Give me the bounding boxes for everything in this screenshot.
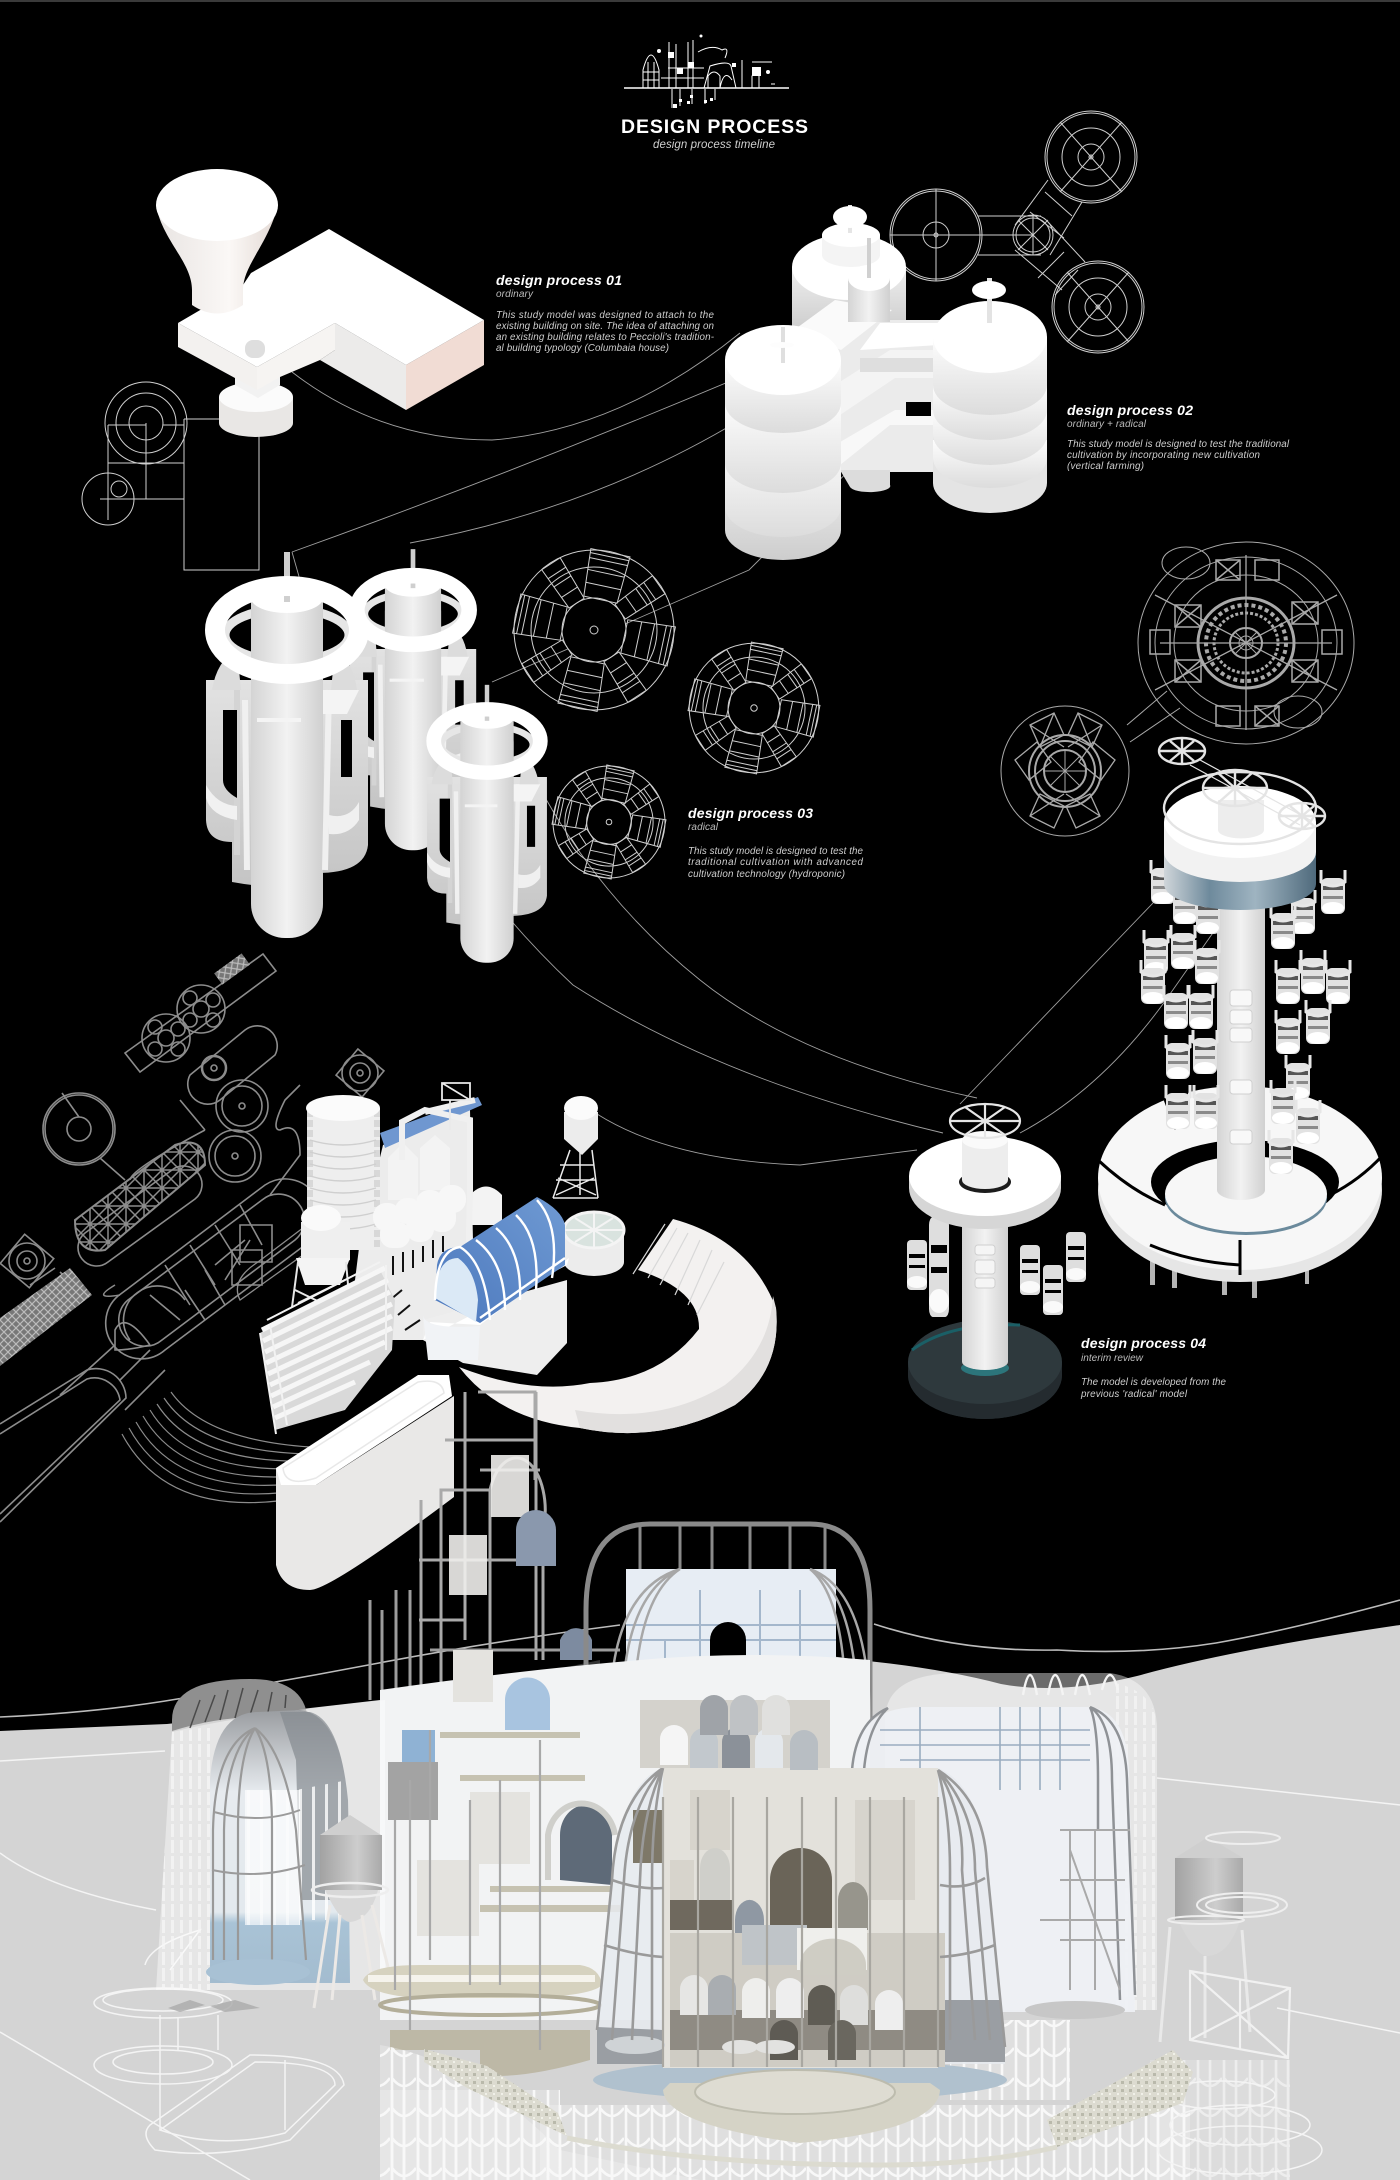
dark base disc — [908, 1331, 1062, 1419]
left top disc — [725, 325, 841, 395]
L-shaped block — [178, 323, 257, 390]
panel: final model upper section — [260, 1083, 777, 1590]
back cage arcs — [610, 1569, 870, 1720]
white platform background — [380, 1655, 870, 2020]
facade bars — [663, 1797, 938, 2067]
center pillar — [848, 278, 890, 322]
base block — [423, 1280, 567, 1375]
text: design process 02 — [1067, 402, 1290, 472]
text: design process 01 — [496, 272, 715, 354]
text: design process 02: design process 02 — [1067, 402, 1193, 418]
text: design process 02: (vertical farming) — [1067, 461, 1144, 472]
column windows — [1230, 990, 1252, 1144]
stage — [663, 2083, 940, 2143]
blue beams — [380, 1097, 482, 1148]
left water tank — [312, 1815, 394, 2008]
hanging pods left — [1141, 860, 1220, 1129]
top disc — [1164, 822, 1316, 882]
connector curves — [292, 333, 1250, 1165]
central facade — [663, 1768, 938, 2068]
plan drawing 02 — [890, 111, 1144, 353]
back stack — [792, 267, 906, 330]
text: design process 01: ordinary — [496, 289, 534, 300]
stone crescents — [424, 2049, 567, 2136]
right top knob — [987, 278, 992, 323]
icon: design process skyline logo — [624, 34, 789, 108]
bridges between stacks — [835, 320, 940, 472]
text: design process 04: design process 04 — [1081, 1335, 1206, 1351]
outer base rings — [1098, 1098, 1382, 1282]
left cage — [210, 1710, 350, 1983]
hanging pods right — [1269, 870, 1350, 1174]
text: design process 03: design process 03 — [688, 805, 813, 821]
wire substructure — [380, 2045, 700, 2180]
crescent amphitheatre — [459, 1219, 777, 1433]
plan room lines — [124, 1225, 272, 1340]
text: design process 01: design process 01 — [496, 272, 622, 288]
right stack — [933, 337, 1047, 513]
text: design process 04: interim review — [1081, 1353, 1144, 1364]
top wheel — [950, 1104, 1020, 1138]
front floor — [593, 2059, 1007, 2101]
truss capsule — [75, 1142, 205, 1251]
text: design process 01: al building typology (Columbaia house) — [496, 343, 669, 354]
small stud — [245, 340, 265, 358]
site plan drawing — [0, 953, 384, 1522]
back concrete arches — [640, 1695, 830, 1770]
medium tower — [350, 549, 476, 850]
upper bridge — [794, 300, 892, 350]
disc — [909, 1176, 1061, 1229]
right cage — [852, 1673, 1157, 2019]
text: design process 04: The model is developed from the — [1081, 1377, 1227, 1388]
lower cylinder — [219, 397, 293, 437]
top wire ring and wheels — [1159, 738, 1325, 844]
text: design process 02: ordinary + radical — [1067, 419, 1147, 430]
pods — [907, 1217, 1086, 1317]
panels and platforms — [363, 1650, 620, 2076]
front cage glass — [597, 1768, 1005, 2064]
back panel — [626, 1569, 836, 1699]
left silo — [301, 1222, 350, 1268]
panel: final model — [0, 1392, 1400, 2180]
text: design process 04: previous 'radical' model — [1080, 1389, 1188, 1400]
glazed band — [1164, 850, 1316, 910]
ground plane — [0, 1625, 1400, 2180]
lower arches — [605, 1925, 945, 2067]
base legs — [1150, 1255, 1309, 1298]
large tower — [206, 552, 368, 938]
panel: design process 03 model — [206, 549, 547, 963]
ground wireframe — [0, 1751, 1400, 2180]
column — [962, 1200, 1008, 1370]
outer white left dome — [172, 1679, 308, 1731]
funnel — [156, 205, 278, 314]
core — [962, 1140, 1008, 1189]
column — [1217, 900, 1265, 1200]
text: design process 03 — [688, 805, 864, 880]
tall scaffold — [370, 1392, 620, 1730]
plan drawings 03 — [513, 549, 820, 879]
plan drawings 04 — [1001, 542, 1354, 836]
front cage arcs — [597, 1768, 1005, 2047]
panel: design process 02 model — [725, 205, 1047, 560]
text: design process 01: an existing building relates to Peccioli's tradition- — [496, 332, 715, 343]
text: design process 04 — [1080, 1335, 1227, 1400]
text: design process 03: This study model is designed to test the — [688, 846, 864, 857]
silos and pipes — [388, 1135, 502, 1225]
subheading: design process timeline — [653, 139, 775, 151]
dark arch — [770, 1848, 832, 1930]
wheel drum — [564, 1232, 624, 1276]
water tower — [553, 1096, 598, 1198]
back dome — [586, 1524, 870, 1720]
plan drawing 01 — [82, 382, 259, 570]
white silo — [307, 1108, 380, 1250]
text: design process 03: cultivation technology (hydroponic) — [688, 869, 845, 880]
text: design process 02: This study model is designed to test the traditional — [1067, 439, 1290, 450]
small tower — [427, 685, 547, 963]
dense truss — [0, 1268, 92, 1366]
horizon line — [0, 1600, 1400, 1717]
blue vault — [435, 1197, 565, 1323]
text: design process 01: existing building on site. The idea of attaching on — [496, 321, 714, 332]
text: design process 01: This study model was designed to attach to the — [496, 310, 715, 321]
panel: design process 04 interim model — [907, 1104, 1086, 1419]
oval tank — [276, 1396, 454, 1590]
panel: design process 04 large tower — [1098, 738, 1383, 1298]
right water tank — [1160, 1832, 1290, 2058]
text: design process 03: radical — [688, 822, 719, 833]
lattice tubes — [260, 1270, 395, 1430]
left stack — [725, 470, 841, 560]
text: design process 02: cultivation by incorporating new cultivation — [1067, 450, 1260, 461]
central white mass — [350, 1110, 473, 1340]
panel: design process 01 model — [82, 169, 484, 570]
text: design process 03: traditional cultivation with advanced — [688, 857, 864, 868]
heading: DESIGN PROCESS — [621, 116, 808, 138]
inner base disc — [1165, 1161, 1327, 1235]
title block — [621, 34, 808, 151]
